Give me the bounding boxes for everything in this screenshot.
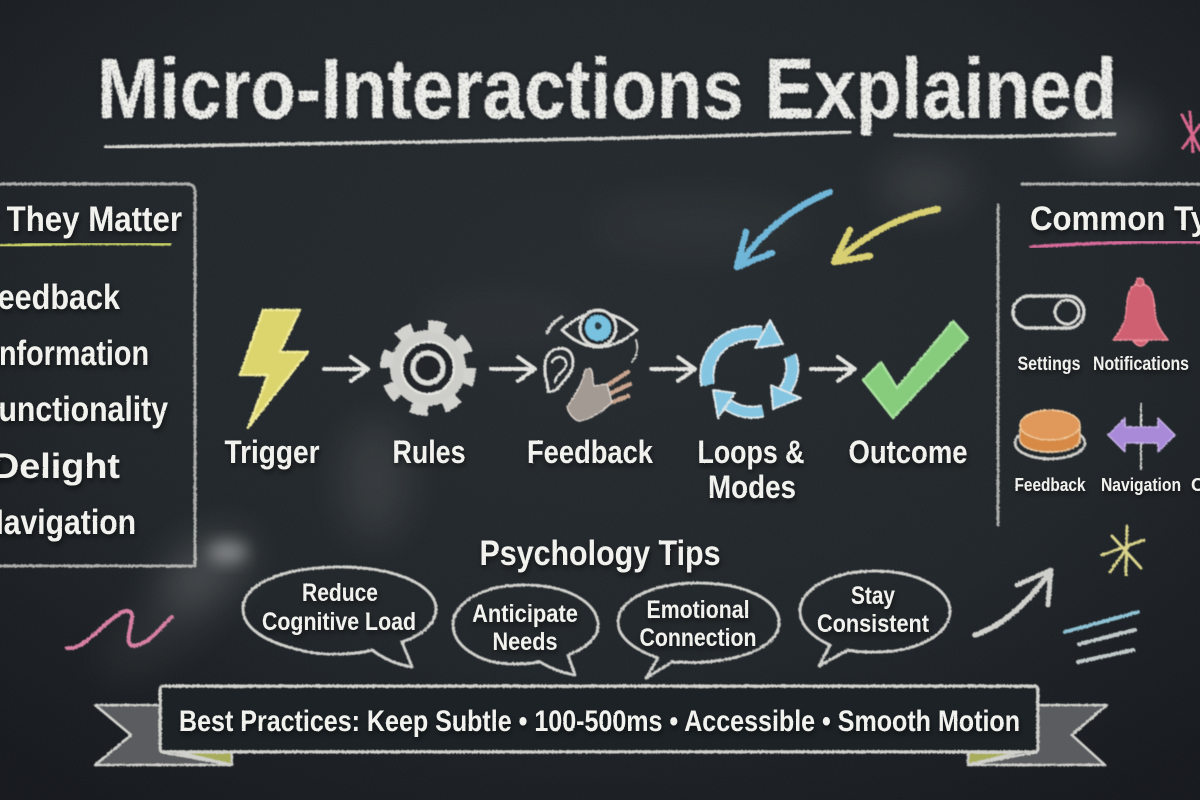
panel: why they matter xyxy=(0,184,195,566)
speech bubble: reduce cognitive load: Cognitive Load xyxy=(262,608,416,636)
decorative streaks xyxy=(1065,612,1138,662)
heading: psychology tips: Psychology Tips xyxy=(480,534,720,573)
list of reasons xyxy=(0,278,168,542)
icon: lightning bolt xyxy=(240,310,308,428)
flow: outcome xyxy=(848,321,968,470)
speech bubble: reduce cognitive load: Reduce xyxy=(302,579,378,607)
arrow: trigger to rules xyxy=(324,357,368,381)
icon: toggle switch xyxy=(1013,296,1084,328)
decorative pink star xyxy=(1182,112,1200,152)
speech bubble: anticipate needs xyxy=(453,585,598,675)
heading underline xyxy=(0,243,170,246)
label: feedback: Feedback xyxy=(527,434,653,470)
arrow: rules to feedback xyxy=(491,357,535,381)
speech bubble: anticipate needs: Anticipate xyxy=(472,600,578,628)
label: trigger: Trigger xyxy=(224,434,320,470)
icon: gear xyxy=(386,326,470,410)
banner body xyxy=(160,686,1038,752)
icon: check mark xyxy=(863,321,968,418)
decorative yellow arrow xyxy=(834,209,938,262)
speech bubble: emotional connection: Connection xyxy=(640,624,756,652)
heading underline xyxy=(1031,242,1200,247)
label: loops and modes: Loops & xyxy=(698,434,804,470)
speech bubble: reduce cognitive load xyxy=(243,567,436,667)
label: navigation: Navigation xyxy=(1101,475,1181,495)
icon: eye xyxy=(547,310,637,362)
title underline xyxy=(106,132,1115,147)
label: rules: Rules xyxy=(392,434,466,470)
speech bubble: stay consistent xyxy=(800,571,950,666)
flow: loops and modes xyxy=(698,320,804,505)
label: settings: Settings xyxy=(1018,354,1080,375)
icon: hand xyxy=(567,368,630,421)
flow: trigger xyxy=(224,310,320,470)
panel: common types xyxy=(998,184,1200,525)
left ribbon tail xyxy=(95,705,232,765)
banner: best practices xyxy=(95,686,1107,765)
icon: circular arrows xyxy=(707,320,801,418)
banner text: Best Practices: Keep Subtle • 100-500ms • Accessible • Smooth Motion xyxy=(179,705,1020,738)
label: loops and modes xyxy=(698,434,804,505)
icon: push button xyxy=(1015,410,1085,459)
label: outcome: Outcome xyxy=(848,434,968,470)
label: loops and modes: Modes xyxy=(708,469,796,505)
icon: navigation arrows xyxy=(1108,403,1175,470)
arrow: feedback to loops xyxy=(651,357,695,381)
speech bubble: stay consistent: Stay xyxy=(851,582,895,610)
decorative pink squiggle xyxy=(67,611,172,648)
icon: ear xyxy=(545,348,573,392)
arrow: loops to outcome xyxy=(811,357,855,381)
icon: bell xyxy=(1113,278,1168,346)
speech bubble: emotional connection xyxy=(618,583,779,678)
decorative star xyxy=(1102,526,1144,575)
flow: rules xyxy=(386,326,470,470)
speech bubble: emotional connection: Emotional xyxy=(646,596,750,624)
speech bubble: stay consistent: Consistent xyxy=(817,610,930,638)
speech bubble: anticipate needs: Needs xyxy=(492,628,558,656)
decorative white arrow xyxy=(975,570,1051,635)
flow: feedback xyxy=(527,310,653,470)
decorative blue arrow xyxy=(737,192,830,267)
right ribbon tail xyxy=(968,705,1107,765)
label: button feedback: Feedback xyxy=(1014,475,1086,495)
